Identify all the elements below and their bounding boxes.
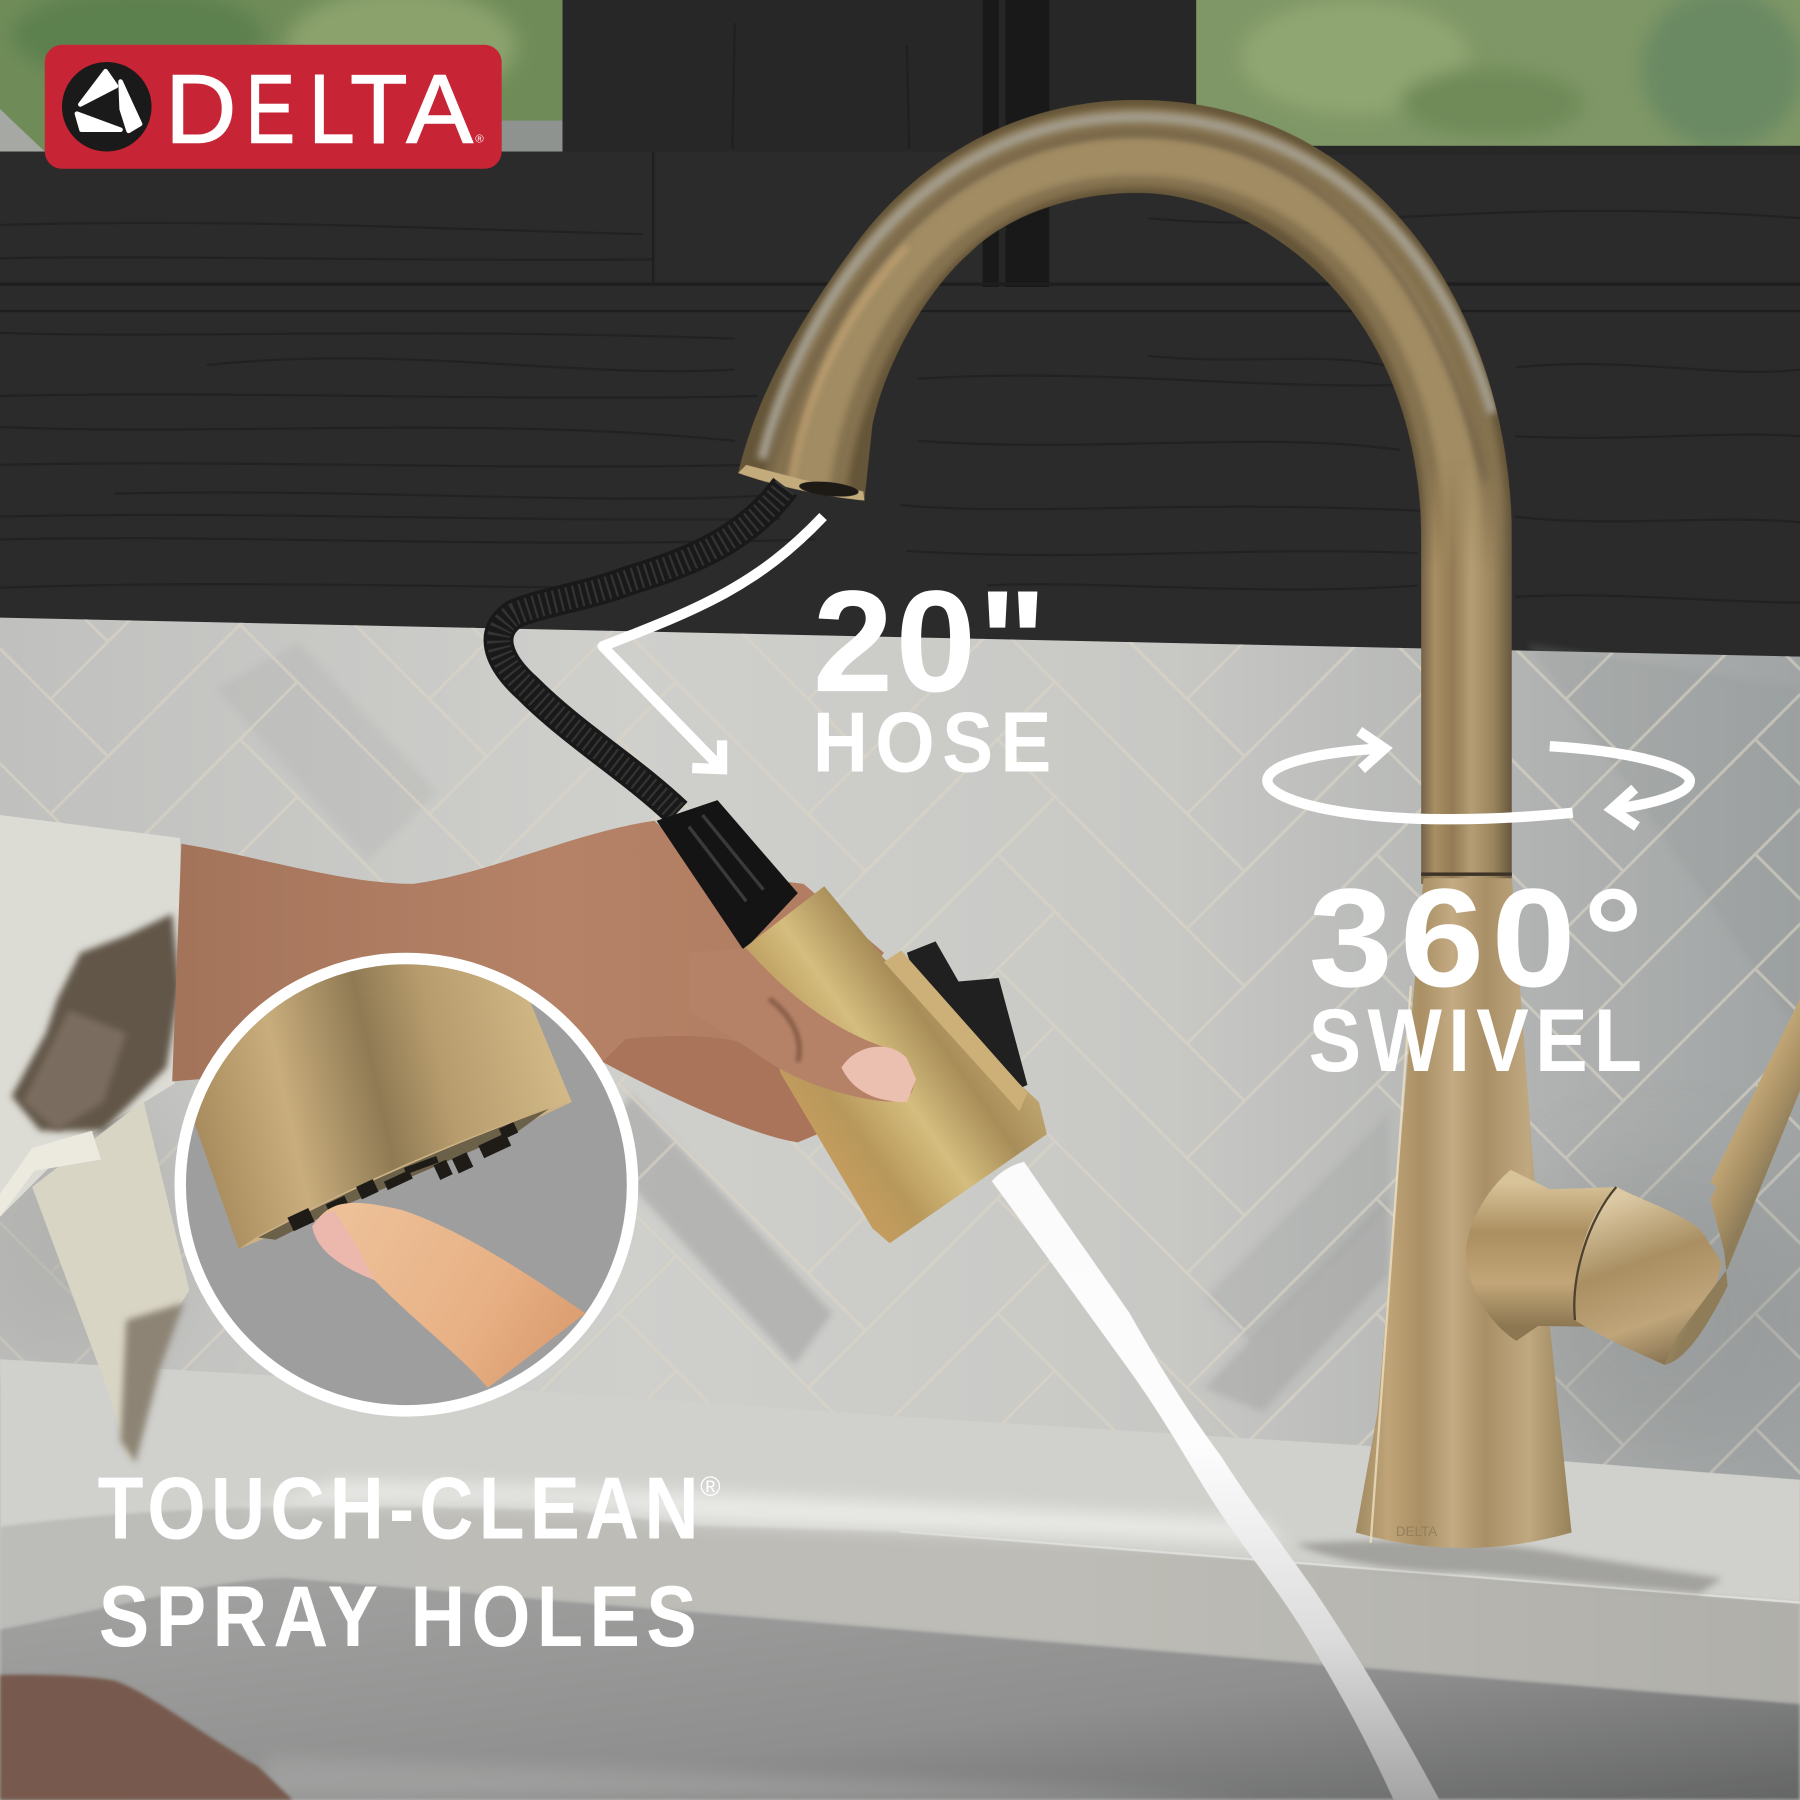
wordmark: L <box>309 54 355 163</box>
touch-clean label: TOUCH-CLEAN <box>98 1460 699 1558</box>
touch-clean label: ® <box>700 1471 721 1502</box>
logo icon <box>62 62 152 152</box>
360 swivel arrows <box>1267 731 1690 827</box>
wordmark: D <box>165 54 236 163</box>
braided hose <box>498 487 785 813</box>
countertop and sink basin <box>0 1359 1800 1800</box>
20 inch hose arrow <box>603 517 823 769</box>
water stream <box>992 1162 1440 1800</box>
marble tiles <box>218 643 1800 1412</box>
delta logo: ® <box>475 133 484 145</box>
handle lever <box>1665 999 1800 1365</box>
gold spray face <box>195 964 572 1249</box>
faucet gooseneck spout <box>723 80 1527 895</box>
hand with arm <box>172 821 884 1142</box>
touch-clean label: SPRAY HOLES <box>99 1570 697 1665</box>
360 swivel label <box>1309 859 1643 1090</box>
wordmark: E <box>246 54 295 163</box>
touch-clean label <box>98 1460 721 1665</box>
20 inch hose label <box>813 560 1051 790</box>
inset circle: spray holes close-up <box>172 941 633 1411</box>
wordmark: A <box>406 54 473 163</box>
360 swivel label: SWIVEL <box>1309 990 1642 1090</box>
delta logo <box>45 45 502 169</box>
handle cylinder <box>1574 1187 1722 1365</box>
base engraving: DELTA <box>1396 1524 1438 1539</box>
fingernail <box>841 1047 916 1102</box>
tiled herringbone wall <box>0 618 1800 1492</box>
360 swivel label: 360° <box>1309 859 1643 1016</box>
gold head <box>744 886 1047 1243</box>
index finger holding head <box>689 948 916 1102</box>
spray head <box>657 800 1047 1243</box>
hand at bottom left <box>0 1675 293 1800</box>
faucet body <box>1356 872 1800 1548</box>
20 inch hose label: 20" <box>813 560 1047 722</box>
sleeve and ribbon <box>0 815 189 1462</box>
20 inch hose label: HOSE <box>813 696 1051 790</box>
wordmark <box>165 54 473 163</box>
window view: right <box>1194 0 1800 149</box>
fingernail <box>312 1212 374 1280</box>
finger <box>312 1203 585 1388</box>
spray nozzles <box>258 1109 549 1240</box>
black collar <box>657 800 798 951</box>
handle hub <box>1466 1170 1630 1341</box>
wordmark: T <box>350 54 408 163</box>
window view: left <box>0 0 565 155</box>
spray buttons <box>907 941 1027 1093</box>
dark wood window frame <box>0 0 1800 657</box>
